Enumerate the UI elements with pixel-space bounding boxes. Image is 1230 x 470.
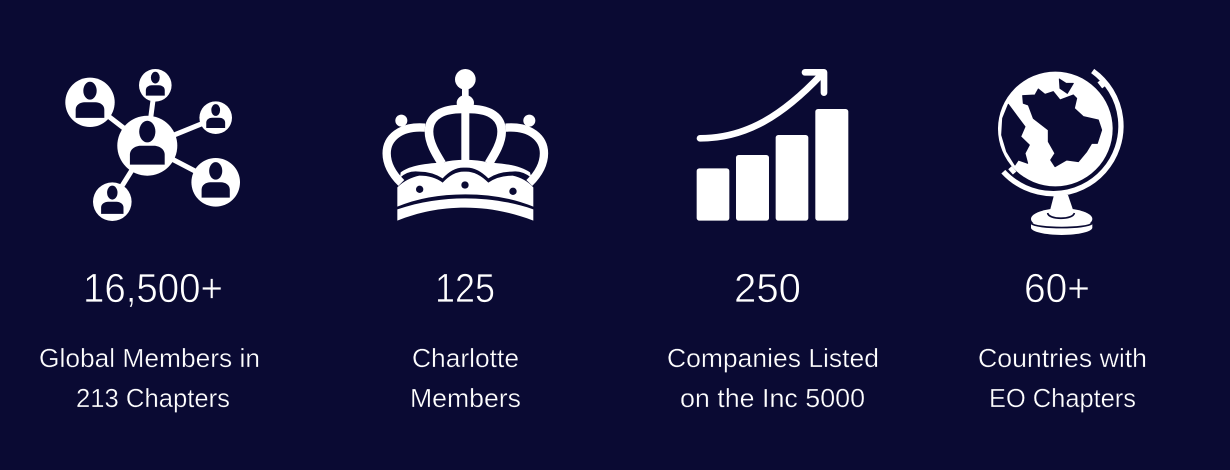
icon: crown [387, 69, 544, 221]
stat: 125 Charlotte members: 125 [435, 265, 495, 311]
stat: 16,500+ global members [39, 265, 260, 413]
stat: 16,500+ global members: 213 Chapters [76, 383, 230, 413]
icon: desk globe [998, 71, 1121, 235]
icon: rising bar chart with arrow [697, 72, 848, 221]
stat: 125 Charlotte members [410, 265, 521, 413]
stat: 60+ countries: 60+ [1024, 265, 1090, 311]
stat: 250 Inc 5000 companies [667, 265, 879, 413]
stat: 60+ countries: EO Chapters [989, 383, 1136, 413]
stat: 250 Inc 5000 companies: on the Inc 5000 [680, 383, 865, 413]
stat: 125 Charlotte members: Charlotte [412, 343, 519, 373]
stat: 125 Charlotte members: Members [410, 383, 521, 413]
stat: 60+ countries: Countries with [978, 343, 1147, 373]
stat: 60+ countries [978, 265, 1147, 413]
stat: 16,500+ global members: 16,500+ [83, 265, 223, 311]
stat: 250 Inc 5000 companies: Companies Listed [667, 343, 879, 373]
stat: 250 Inc 5000 companies: 250 [734, 265, 801, 311]
icon: people network [65, 69, 240, 221]
stat: 16,500+ global members: Global Members in [39, 343, 260, 373]
